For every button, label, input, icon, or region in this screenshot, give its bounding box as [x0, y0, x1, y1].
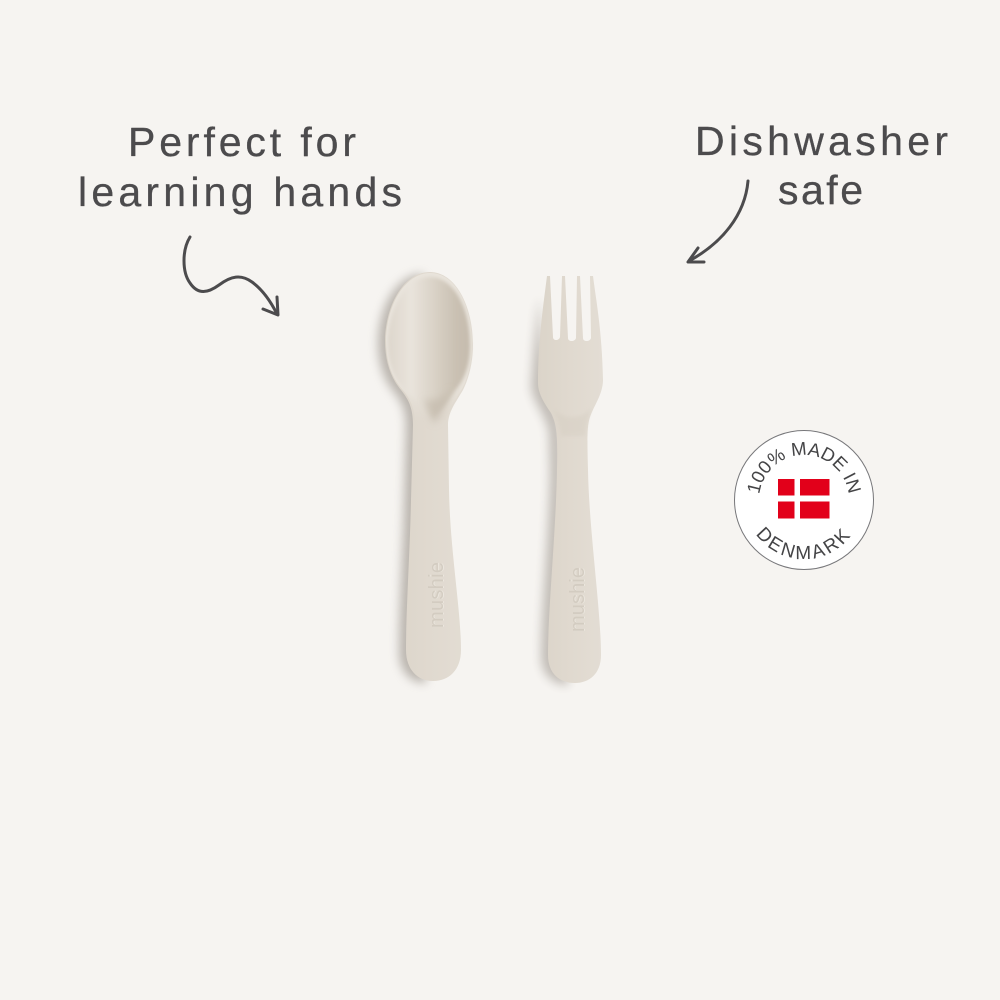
heading: perfect for learning hands: learning hands — [78, 169, 402, 215]
heading: dishwasher safe: Dishwasher — [695, 118, 948, 164]
spoon neck shading — [424, 388, 452, 424]
arrow: curved arrow to fork — [688, 181, 748, 262]
spoon bowl rim — [386, 273, 472, 420]
heading: perfect for learning hands — [78, 119, 402, 215]
fork neck shading — [553, 408, 591, 436]
heading: dishwasher safe: safe — [778, 167, 863, 213]
fork shadow — [531, 297, 568, 685]
heading: perfect for learning hands: Perfect for — [128, 119, 356, 165]
fork — [531, 276, 603, 685]
arrow: wavy arrow to spoon — [184, 237, 278, 315]
spoon bowl hollow — [388, 277, 470, 418]
spoon logo: mushie — [427, 562, 449, 628]
badge flag — [778, 479, 830, 518]
fork logo: mushie — [568, 567, 590, 632]
spoon logo: mushie — [426, 562, 448, 628]
spoon body — [385, 272, 473, 681]
heading: dishwasher safe — [695, 118, 948, 213]
badge text top: 100% MADE IN — [748, 442, 861, 493]
badge: 100% made in Denmark — [734, 430, 874, 570]
spoon — [378, 272, 473, 683]
fork logo: mushie — [567, 567, 589, 632]
spoon shadow — [378, 274, 433, 683]
badge text bottom: DENMARK — [756, 526, 851, 560]
badge circle — [734, 430, 874, 570]
fork body — [538, 276, 603, 683]
